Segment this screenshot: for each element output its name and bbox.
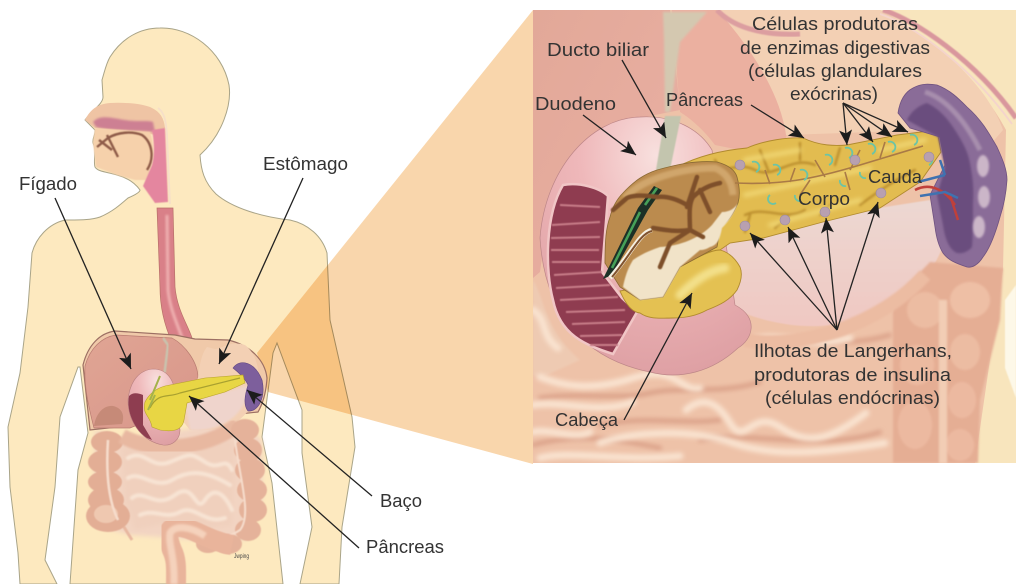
head lobe highlights: [680, 268, 725, 295]
ascending colon: [86, 431, 132, 540]
label: exocrine cells: de enzimas digestivas: [740, 38, 930, 58]
pancreatic ducts in head: [613, 177, 720, 267]
zoom beam connecting torso to detail panel: [257, 10, 533, 464]
pale cut tissue: [623, 203, 738, 300]
label: islets of Langerhans: (células endócrinas): [765, 388, 940, 408]
arrow to pancreas body: [751, 105, 804, 138]
bile duct upper: [663, 12, 707, 112]
cut section light rim: [625, 168, 733, 198]
body silhouette: [8, 28, 355, 584]
pharynx pale wall: [158, 108, 170, 204]
label: Fígado: Fígado: [19, 174, 77, 194]
signature: Jwping: [234, 554, 249, 560]
intestine shadow folds: [533, 335, 890, 448]
duodenum villi: [551, 205, 625, 345]
arrow to pancreas: [189, 396, 359, 548]
intestine light folds: [533, 310, 885, 458]
esophagus highlight: [167, 215, 182, 338]
stomach lower: [185, 385, 250, 430]
spleen: [233, 363, 263, 411]
label: Cabeça: Cabeça: [555, 410, 619, 430]
pancreas body: [683, 132, 942, 252]
text labels: main figure: [19, 154, 444, 557]
pancreas head lower lobe: [620, 250, 741, 318]
arrow to liver: [55, 198, 131, 369]
label: Pâncreas detail: Pâncreas: [666, 90, 743, 110]
nasal passage shading: [93, 117, 155, 132]
secondary duct core: [612, 231, 652, 277]
duodenum inner cut: [548, 184, 637, 354]
white outside body: [1005, 285, 1016, 398]
label: Duodeno: Duodeno: [535, 94, 616, 114]
human body figure: [8, 28, 355, 584]
falciform ligament: [163, 338, 168, 385]
stomach: [178, 343, 258, 430]
diaphragm outline: [83, 331, 267, 430]
colon beads on right: [893, 262, 1003, 463]
label: exocrine cells: [740, 14, 930, 104]
duodenum: [128, 369, 180, 445]
colon taeniae: [939, 300, 947, 463]
gallbladder: [94, 406, 123, 426]
pancreas texture: [715, 143, 915, 232]
pancreas duct: [150, 378, 240, 408]
arrow to spleen: [247, 390, 372, 496]
diaphragm inner line: [880, 14, 1012, 124]
label: exocrine cells: Células produtoras: [752, 14, 918, 34]
pancreas head cut section: [605, 162, 739, 300]
arrows to exocrine cells: [843, 103, 908, 145]
liver: [85, 335, 200, 428]
label: Baço: Baço: [380, 491, 422, 511]
diaphragm band left: [717, 10, 800, 34]
tongue arc: [97, 133, 152, 170]
label: exocrine cells: exócrinas): [790, 84, 878, 104]
label: islets of Langerhans: produtoras de insulina: [754, 365, 952, 385]
duodenum outer: [540, 117, 751, 375]
acini teal arcs: [752, 135, 932, 204]
mouth cavity: [93, 128, 153, 180]
descending colon: [195, 419, 267, 554]
esophagus: [157, 208, 192, 342]
liver right lobe: [672, 10, 787, 150]
sigmoid colon and rectum: [168, 527, 232, 584]
pancreas highlights: [745, 140, 925, 225]
main pancreatic duct: [735, 142, 923, 195]
panel: pancreas detail: [533, 10, 1016, 463]
arrow to bile duct: [622, 60, 666, 138]
duodenum interior: [128, 393, 152, 440]
arrows: detail panel: [583, 60, 908, 420]
label: islets of Langerhans: Ilhotas de Langerhans,: [754, 341, 952, 361]
text labels: detail panel: [535, 14, 952, 430]
arrows: main figure: [55, 178, 372, 548]
right body exterior: [880, 10, 1016, 463]
label: exocrine cells: (células glandulares: [748, 61, 922, 81]
arrow to pancreas head: [624, 293, 692, 420]
pharynx: [143, 128, 168, 203]
label: Pâncreas: Pâncreas: [366, 537, 444, 557]
islets of Langerhans: [735, 152, 934, 231]
bile duct: [148, 376, 160, 410]
splenic vessels: [915, 160, 958, 220]
label: Cauda: Cauda: [868, 167, 923, 187]
pancreas: [144, 375, 245, 431]
rectum highlight: [170, 528, 205, 584]
green bile duct highlight: [612, 188, 657, 268]
abdominal cavity base: [95, 420, 262, 540]
arrow to stomach: [219, 178, 303, 364]
upper stomach: [721, 10, 1003, 140]
spleen inner dark surface: [907, 103, 973, 253]
spleen ridges: [925, 92, 990, 238]
lower stomach: [725, 200, 945, 326]
arrow to duodenum: [583, 115, 636, 155]
transverse colon segment: [745, 275, 925, 342]
label: Corpo: Corpo: [798, 189, 850, 209]
small intestine folds: [128, 455, 232, 519]
small intestine: [122, 440, 235, 530]
lower intestine mass: [533, 280, 890, 458]
transverse colon: [122, 425, 238, 447]
spleen: [898, 84, 1007, 267]
pale secondary duct: [610, 230, 652, 278]
green bile duct: [603, 186, 662, 279]
label: Ducto biliar: Ducto biliar: [547, 40, 649, 60]
panel background: [533, 10, 1016, 463]
bile duct lower: [656, 116, 681, 170]
arrows to islets: [750, 202, 878, 330]
left strip folds: [534, 286, 577, 374]
label: islets of Langerhans: [754, 341, 952, 408]
diaphragm band right: [883, 10, 1016, 118]
nasal cavity: [85, 103, 165, 135]
liver left lobe: [533, 10, 680, 278]
label: Estômago: Estômago: [263, 154, 348, 174]
